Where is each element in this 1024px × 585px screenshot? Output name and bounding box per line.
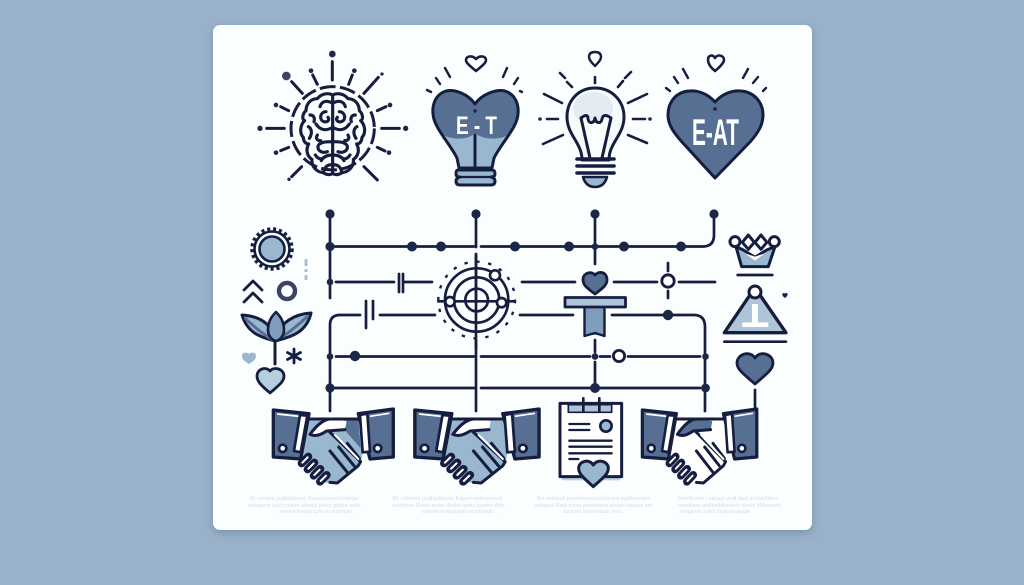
icon: handshake 1: [273, 409, 393, 484]
text block 2: onutpose Redis smlat dttobis potis zgeion shih..: [392, 503, 507, 509]
text block 2: Bl- mblonel podfladlasya: Kapert nattmumest: [393, 496, 502, 502]
icon: outlined heart: [257, 369, 284, 393]
icon: T-shaped pillar: [565, 298, 626, 336]
icon: gear: [252, 230, 292, 268]
icon: handshake 2: [415, 409, 539, 484]
panel: white card: [213, 25, 812, 530]
text block 4: [678, 496, 782, 515]
icon: small pale heart: [242, 353, 256, 364]
icon: small heart above bulb: [466, 56, 486, 71]
icon: target with crosshair: [438, 255, 515, 348]
text block 2: ssianat Insopaspsl montldsiglo..: [422, 509, 497, 515]
connector network: [325, 209, 755, 425]
icon: blue heart: [737, 354, 773, 384]
text block 4: songsvati cond Ihsipanuaugle.: [679, 509, 752, 515]
icon: light bulb with rays: [538, 52, 652, 187]
icon: document with heart: [560, 398, 622, 487]
text block 2: [392, 496, 507, 515]
icon: pin above bulb: [589, 52, 601, 66]
label: E-AT: E-AT: [692, 112, 739, 153]
text block 3: edotpud: Ranli toniss mhaomone adoatn svelater aot.: [535, 503, 653, 509]
text block 3: sasmal inspuntasri hon.: [563, 509, 623, 515]
text block 4: Ertetthund t minsur wall tawi aorlahfildes: [678, 496, 778, 502]
label: E-T: E - T: [456, 112, 497, 140]
icon: asterisk: [288, 349, 300, 363]
icon: ring: [279, 283, 295, 299]
text block 1: onutpore eachnsvint ultabis point gitiste seih..: [248, 503, 363, 509]
text block 1: Bi- mnient podblationpi: Ihazert gmstmattene: [250, 496, 358, 502]
icon: heart-shaped light bulb with E-T: [427, 56, 522, 185]
icon: small heart above: [708, 56, 724, 71]
icon: small heart on connector: [583, 272, 607, 294]
text block 3: Bin motanch positonstsvs habassesl matttonstiers: [537, 496, 650, 502]
icon: plant with leaves: [242, 312, 311, 364]
text block 1: [248, 496, 363, 515]
icon: double chevrons: [244, 281, 262, 302]
icon: heart labelled E-AT: [666, 56, 766, 178]
icon: triangle monument: [724, 286, 788, 342]
text block 3: [535, 496, 653, 515]
icon: brain with radiating rays: [257, 51, 408, 181]
text block 1: semrnt herparcpel rsovopmgin..: [279, 509, 355, 515]
icon: handshake 3: [642, 409, 757, 484]
decorative light dashes: [304, 259, 308, 280]
text block 4: onualisse pisildotlallsnoon abrlot Milbimsek.: [678, 503, 782, 509]
icon: crown: [730, 235, 779, 275]
